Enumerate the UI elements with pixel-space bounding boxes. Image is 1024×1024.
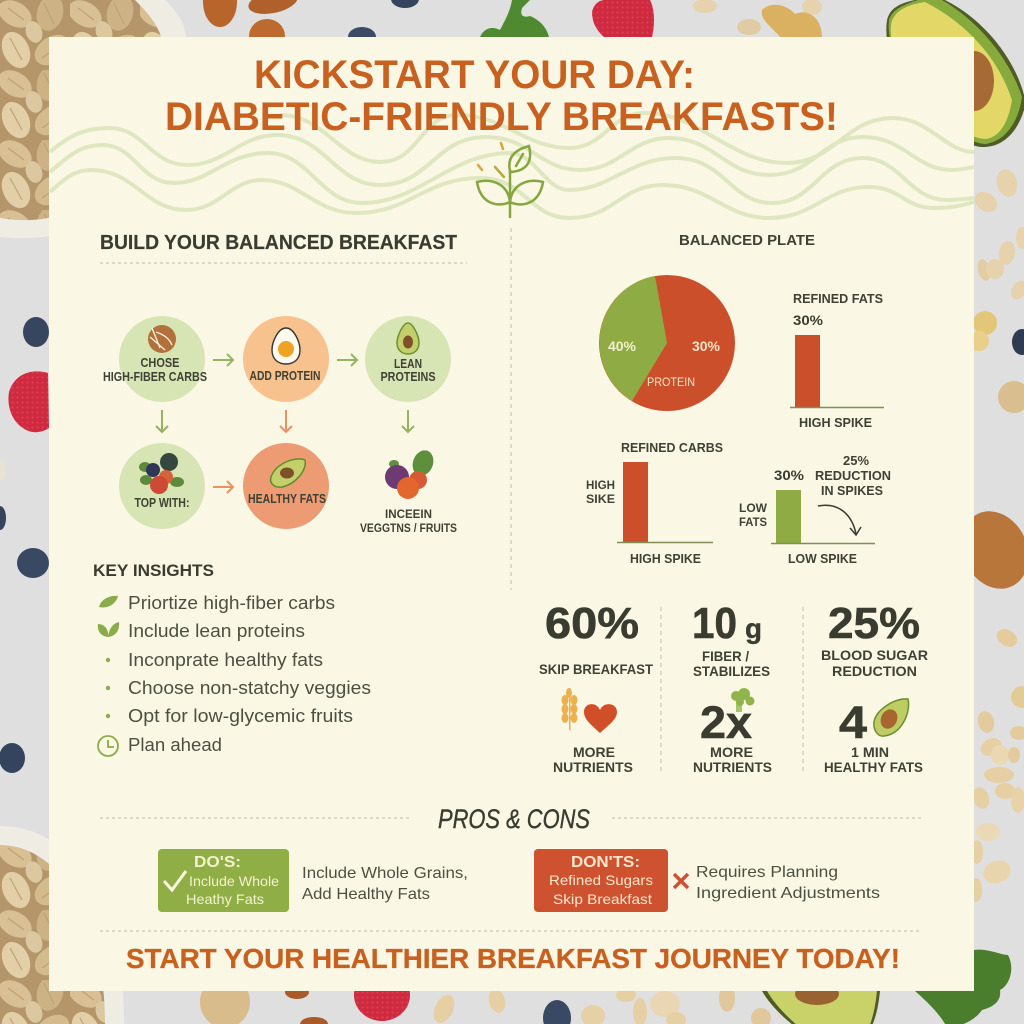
stat: 60 percent skip breakfast: MORE bbox=[573, 744, 615, 760]
stat: 60 percent skip breakfast: NUTRIENTS bbox=[553, 759, 633, 775]
heading: pros and cons: PROS & CONS bbox=[438, 804, 590, 834]
stat: 60 percent skip breakfast: 60% bbox=[545, 599, 639, 648]
flow diagram bbox=[103, 316, 457, 535]
title: DIABETIC-FRIENDLY BREAKFASTS! bbox=[165, 95, 838, 139]
bar chart: low spike: LOW bbox=[739, 503, 767, 515]
text: don'ts details: Ingredient Adjustments bbox=[696, 885, 880, 902]
text: do's details: Include Whole Grains, bbox=[302, 865, 468, 882]
step: healthy fats: HEALTHY FATS bbox=[248, 492, 326, 506]
bar chart: refined fats bbox=[790, 292, 884, 430]
text: don'ts details bbox=[696, 864, 880, 902]
key insights: Choose non-statchy veggies bbox=[128, 678, 371, 698]
bar chart: refined carbs: SIKE bbox=[586, 494, 615, 506]
stat: 25 percent blood sugar reduction: 4 bbox=[839, 697, 867, 748]
arrow: carbs to protein bbox=[213, 354, 233, 366]
bullet bbox=[106, 686, 110, 690]
step: lean proteins bbox=[365, 316, 451, 402]
step: top with bbox=[119, 443, 205, 529]
food scattered along the left bbox=[0, 317, 49, 773]
icon: cross bbox=[674, 874, 688, 888]
bar chart: refined fats: REFINED FATS bbox=[793, 292, 883, 306]
step: healthy fats bbox=[243, 443, 329, 529]
oat bowl top left bbox=[0, 0, 187, 238]
bar chart: low spike bbox=[739, 453, 891, 566]
step: add protein: ADD PROTEIN bbox=[250, 369, 320, 383]
icon: plant sprout bbox=[477, 143, 543, 217]
bar chart: low spike: REDUCTION bbox=[815, 468, 891, 483]
arrow: top with to healthy fats bbox=[213, 481, 233, 493]
panel: don'ts: Refined Sugars bbox=[549, 872, 653, 888]
pie chart: 40% bbox=[608, 338, 637, 354]
text: do's details bbox=[302, 865, 468, 903]
icon: leaves bbox=[98, 622, 119, 637]
panel: do's bbox=[158, 849, 289, 912]
bar chart: refined fats: HIGH SPIKE bbox=[799, 415, 872, 430]
arrow: lean proteins to veggies bbox=[402, 410, 414, 432]
title bbox=[165, 53, 838, 139]
pie chart: 30% bbox=[692, 338, 721, 354]
stat: 10 grams fiber: g bbox=[745, 613, 762, 644]
stat: 60 percent skip breakfast bbox=[539, 599, 653, 775]
stat: 25 percent blood sugar reduction: 25% bbox=[828, 599, 920, 648]
panel: don'ts: Skip Breakfast bbox=[553, 891, 652, 907]
stat: 60 percent skip breakfast: SKIP BREAKFAST bbox=[539, 661, 653, 677]
oat bowl bottom left bbox=[0, 826, 124, 1024]
footer call to action: START YOUR HEALTHIER BREAKFAST JOURNEY TODAY! bbox=[126, 943, 900, 974]
step: include veggies and fruits: VEGGTNS / FRUITS bbox=[360, 521, 457, 535]
stat: 10 grams fiber: NUTRIENTS bbox=[693, 759, 772, 775]
key insights: Inconprate healthy fats bbox=[128, 650, 323, 670]
text: don'ts details: Requires Planning bbox=[696, 864, 838, 881]
stat: 25 percent blood sugar reduction: HEALTHY FATS bbox=[824, 759, 923, 775]
bar chart: refined carbs: HIGH SPIKE bbox=[630, 551, 701, 566]
icon: clock bbox=[98, 736, 118, 756]
icon: avocado bbox=[874, 699, 909, 736]
bar chart: refined fats: 30% bbox=[793, 312, 824, 328]
panel: don'ts: DON'TS: bbox=[571, 854, 640, 871]
step: choose high-fiber carbs: CHOSE bbox=[140, 356, 180, 370]
step: add protein bbox=[243, 316, 329, 402]
bar chart: refined carbs: REFINED CARBS bbox=[621, 440, 723, 455]
icon: wheat bbox=[562, 688, 578, 730]
stat: 10 grams fiber bbox=[692, 599, 772, 775]
key insights: Include lean proteins bbox=[128, 621, 305, 641]
step: choose high-fiber carbs: HIGH-FIBER CARBS bbox=[103, 370, 207, 384]
bar chart: low spike: FATS bbox=[739, 517, 767, 529]
key insights bbox=[93, 561, 371, 756]
key insights: Plan ahead bbox=[128, 735, 222, 755]
heading: balanced plate: BALANCED PLATE bbox=[679, 232, 815, 249]
arrow: protein to healthy fats bbox=[280, 410, 292, 432]
stat: 10 grams fiber: 2x bbox=[700, 697, 752, 748]
stat: 25 percent blood sugar reduction bbox=[821, 599, 928, 775]
icon: heart bbox=[584, 704, 617, 733]
stat: 10 grams fiber: MORE bbox=[710, 744, 753, 760]
panel: do's: Heathy Fats bbox=[186, 891, 264, 907]
stat: 10 grams fiber: FIBER / bbox=[702, 648, 749, 664]
step: choose high-fiber carbs bbox=[103, 316, 207, 402]
key insights: Priortize high-fiber carbs bbox=[128, 593, 335, 613]
bullet bbox=[106, 658, 110, 662]
pie chart bbox=[599, 275, 735, 411]
stat: 25 percent blood sugar reduction: 1 MIN bbox=[851, 744, 889, 760]
arrow: protein to lean proteins bbox=[337, 354, 357, 366]
stat: 25 percent blood sugar reduction: REDUCTION bbox=[832, 663, 917, 679]
decorative waves bbox=[50, 113, 974, 218]
step: lean proteins: PROTEINS bbox=[380, 370, 436, 384]
heading: build your balanced breakfast: BUILD YOUR BALANCED BREAKFAST bbox=[100, 232, 457, 254]
bar chart: low spike: LOW SPIKE bbox=[788, 551, 857, 566]
stat: 10 grams fiber: STABILIZES bbox=[693, 663, 770, 679]
panel: don'ts bbox=[534, 849, 668, 912]
food scattered along the bottom bbox=[200, 950, 1011, 1024]
text: do's details: Add Healthy Fats bbox=[302, 886, 430, 903]
bar chart: low spike: 25% bbox=[843, 453, 869, 468]
food scattered along the right bbox=[949, 167, 1024, 902]
panel: do's: DO'S: bbox=[194, 854, 241, 871]
step: lean proteins: LEAN bbox=[394, 357, 422, 371]
panel: do's: Include Whole bbox=[189, 873, 279, 889]
step: include veggies and fruits: INCEEIN bbox=[385, 507, 432, 521]
bar chart: refined carbs: HIGH bbox=[586, 480, 615, 492]
key insights: Opt for low-glycemic fruits bbox=[128, 706, 353, 726]
bullet bbox=[106, 714, 110, 718]
avocado top right bbox=[886, 0, 1024, 147]
stat: 10 grams fiber: 10 bbox=[692, 599, 737, 648]
bar chart: low spike: IN SPIKES bbox=[821, 483, 883, 498]
stat: 25 percent blood sugar reduction: BLOOD SUGAR bbox=[821, 647, 928, 663]
bar chart: low spike: 30% bbox=[774, 467, 805, 483]
step: include veggies and fruits bbox=[360, 447, 457, 535]
food scattered along the top bbox=[203, 0, 822, 53]
icon: check mark bbox=[164, 871, 186, 890]
title: KICKSTART YOUR DAY: bbox=[254, 53, 695, 97]
icon: broccoli bbox=[731, 688, 754, 712]
step: top with: TOP WITH: bbox=[134, 496, 190, 510]
bar chart: refined carbs bbox=[586, 440, 723, 566]
icon: leaf bbox=[99, 596, 118, 607]
key insights: KEY INSIGHTS bbox=[93, 561, 214, 580]
pie chart: PROTEIN bbox=[647, 375, 695, 389]
arrow: carbs to top with bbox=[156, 410, 168, 432]
